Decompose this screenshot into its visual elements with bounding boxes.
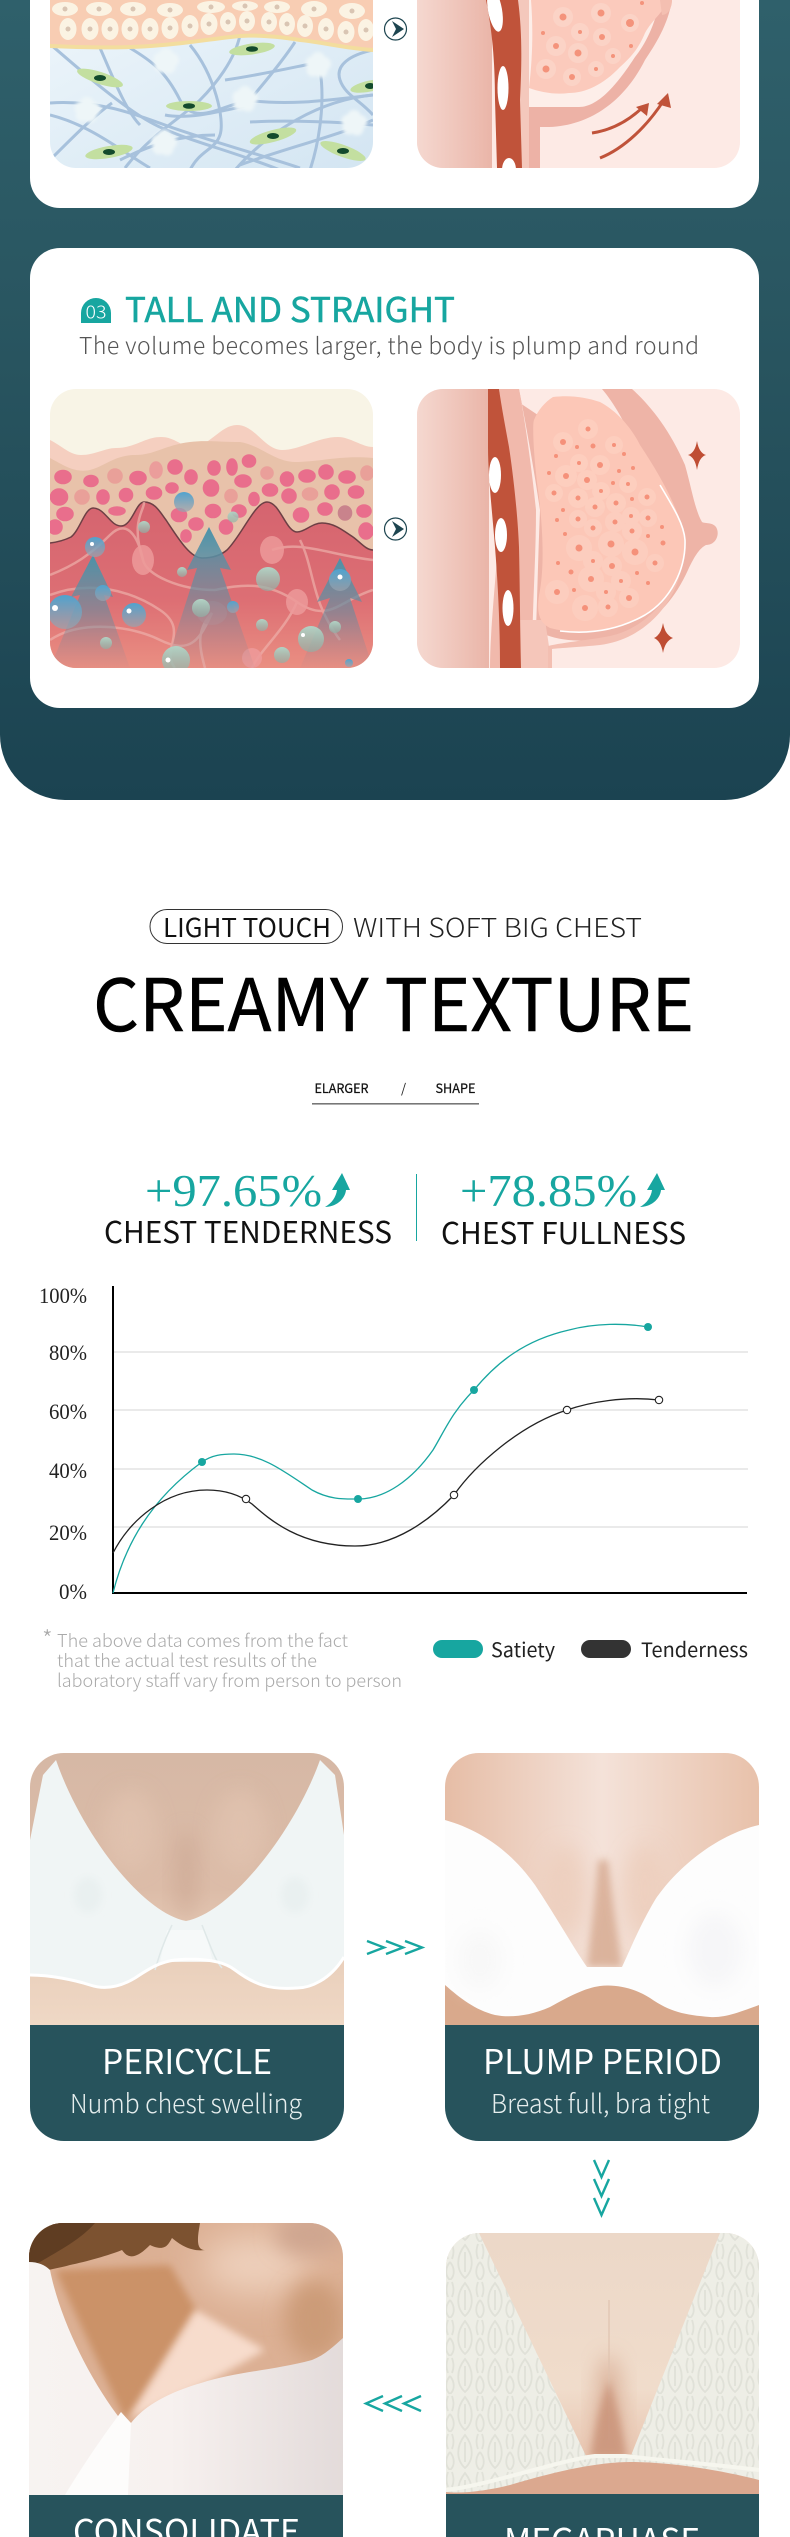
heading: tall and straight: TALL AND STRAIGHT [125,283,455,332]
footnote: The above data comes from the fact [57,1627,349,1653]
panel: dark teal background [0,0,790,800]
footnote: * [42,1620,53,1655]
white hyaluronic puffs [74,48,367,156]
water bubbles [48,492,353,674]
illustration: lifted breast cross-section [417,0,740,182]
illustration: full breast cross-section [417,389,740,668]
stat: chest fullness: CHEST FULLNESS [441,1209,686,1253]
divider between stats [416,1174,417,1241]
white fat ovals [487,0,516,168]
stat: chest tenderness: CHEST TENDERNESS [104,1208,392,1252]
y axis labels: 80% [49,1340,87,1365]
subtitle: elarger / shape [312,1078,479,1105]
panel: pericycle card: Numb chest swelling [70,2084,302,2121]
muscle stripe [488,389,521,668]
label band [445,2025,759,2141]
capillary web [50,502,373,668]
heading: light touch with soft big chest: LIGHT TOUCH [163,908,331,945]
panel: pericycle card [30,1753,344,2141]
label band [29,2495,343,2537]
legend: Tenderness [641,1634,748,1663]
y axis labels: 0% [59,1579,87,1604]
panel: plump period card: PLUMP PERIOD [483,2035,722,2084]
blue upward arrows [50,527,373,668]
panel: pericycle card: PERICYCLE [102,2035,272,2084]
title: creamy texture: CREAMY TEXTURE [93,947,694,1052]
y axis labels [39,1283,87,1604]
legend [433,1634,748,1663]
heading: light touch with soft big chest: WITH SOFT BIG CHEST [353,908,642,945]
subtitle: elarger / shape: SHAPE [436,1078,476,1097]
panel: consolidate card [29,2215,345,2537]
stat: chest tenderness [104,1165,392,1252]
stat: chest fullness [441,1165,686,1253]
panel: plump period card [445,1753,759,2141]
illustration: skin layers with hydration arrows [48,389,373,674]
y axis labels: 100% [39,1283,87,1308]
y axis labels: 40% [49,1458,87,1483]
photo: lace bra [446,2233,759,2494]
sparkles [654,441,706,653]
arrow: circle between images [384,518,406,540]
arrow: circle between images [384,18,406,40]
series: satiety [113,1323,652,1593]
text: step description: The volume becomes larger, the body is plump and round [79,327,699,361]
red blood cells [48,455,373,542]
panel: plump period card: Breast full, bra tight [491,2084,710,2121]
green fibroblast cells [77,42,373,161]
panel: megaphase card [446,2233,759,2537]
line chart [39,1283,748,1604]
panel: step 02 card [30,0,759,208]
series: tenderness [113,1396,663,1553]
mammary gland [533,396,685,632]
y axis labels: 60% [49,1399,87,1424]
epidermis skin layer with cells [50,0,374,52]
footnote [42,1620,402,1693]
icon: up arrow [325,1173,350,1207]
arrow: chevrons down [594,2160,609,2215]
photo: neutral bra with hair [29,2215,345,2495]
arrow: chevrons right [367,1941,422,1954]
label band [446,2494,759,2537]
outer breast tissue band [499,389,718,641]
garment [29,2262,343,2495]
gland dots [536,3,639,86]
hair [29,2223,205,2275]
illustration: collagen fibres under skin [50,0,391,170]
icon: up arrow [640,1173,665,1207]
photo: white bra, full [445,1753,759,2025]
subtitle: elarger / shape: / [401,1078,406,1097]
label band [30,2025,344,2141]
icon: step number badge [81,298,111,324]
gland dots [545,419,664,621]
subtitle: elarger / shape: ELARGER [314,1078,368,1097]
stat: chest fullness: +78.85% [460,1165,637,1216]
footnote: that the actual test results of the [57,1647,317,1673]
stat: chest tenderness: +97.65% [145,1165,322,1216]
icon: step number badge: 03 [86,298,106,324]
photo: white bra, small [30,1753,344,2025]
arrow: chevrons left [366,2396,421,2411]
white fat ovals [489,457,514,626]
panel: step 03 card [30,248,759,708]
legend: Satiety [491,1634,556,1663]
y axis labels: 20% [49,1520,87,1545]
red lift arrows [592,100,664,158]
heading: light touch with soft big chest [150,908,642,945]
footnote: laboratory staff vary from person to person [57,1667,402,1693]
